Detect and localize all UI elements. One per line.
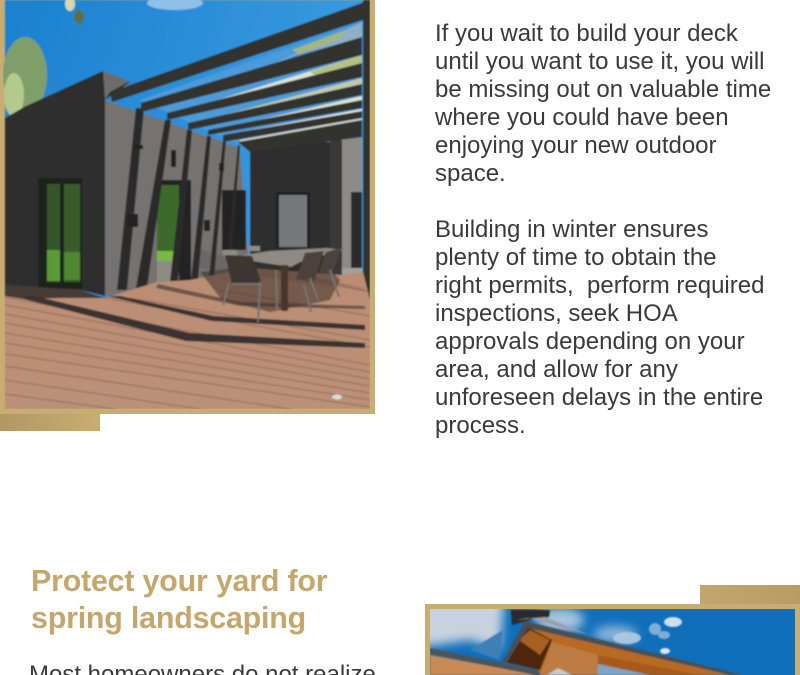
illustration: deck photo with gold frame [0, 0, 375, 431]
text block: deck timing: area, and allow for any [435, 356, 678, 383]
heading: protect your yard: spring landscaping [31, 601, 306, 635]
slanted pier shadows [117, 108, 240, 290]
chimney [511, 610, 550, 625]
text block: deck timing: until you want to use it, you will [435, 48, 764, 75]
deck [5, 268, 370, 409]
text block: deck timing: enjoying your new outdoor [435, 132, 717, 159]
eave trim [502, 621, 743, 675]
deck boards [5, 276, 370, 409]
text block: deck timing: where you could have been [435, 104, 729, 131]
deck shadows [5, 250, 365, 348]
illustration: house roof photo with gold frame [425, 585, 800, 675]
dark house wall [5, 71, 130, 296]
pergola beams [110, 0, 370, 347]
brick wall [430, 655, 538, 675]
wall lamps [127, 145, 224, 231]
text block: deck timing: Building in winter ensures [435, 216, 708, 243]
text block: deck timing: right permits, perform required [435, 272, 764, 299]
text block: deck timing: plenty of time to obtain the [435, 244, 717, 271]
text block: deck timing: approvals depending on your [435, 328, 745, 355]
patio table and chairs [200, 246, 343, 322]
text block: deck timing: unforeseen delays in the entire [435, 384, 763, 411]
tree foliage [3, 0, 84, 155]
gold accent bar [0, 414, 100, 431]
text block: deck timing: process. [435, 412, 526, 439]
heading: protect your yard [31, 564, 328, 635]
text block: deck timing: space. [435, 160, 506, 187]
heading: protect your yard: Protect your yard for [31, 564, 327, 598]
text block: deck timing [435, 20, 771, 439]
text block: deck timing: inspections, seek HOA [435, 300, 678, 327]
windows and doors [38, 178, 82, 289]
gold frame over right edge [370, 0, 375, 414]
text block: deck timing: If you wait to build your deck [435, 20, 738, 47]
background trees behind pergola [140, 22, 362, 145]
text block: deck timing: be missing out on valuable time [435, 76, 771, 103]
gutter [430, 648, 541, 675]
gray piers [105, 100, 250, 296]
soffit [505, 627, 743, 675]
